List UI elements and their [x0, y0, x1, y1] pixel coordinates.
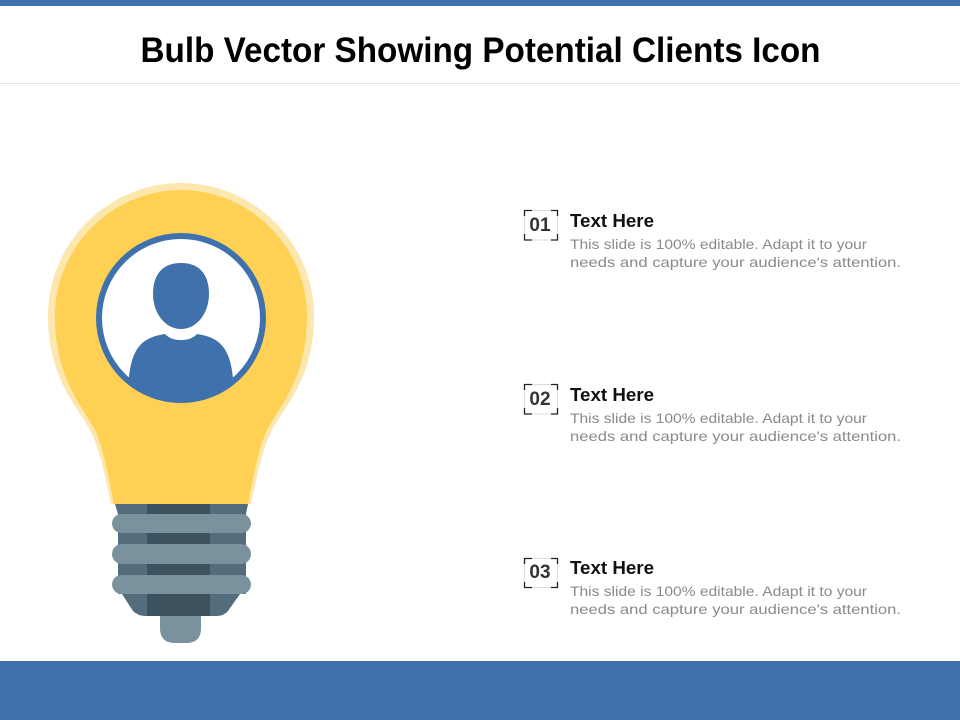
base tip: [160, 616, 201, 643]
portrait circle: [99, 236, 263, 400]
top bar: [0, 0, 960, 6]
bulb glass: [55, 190, 307, 504]
screw ring 1: [112, 514, 251, 533]
screw ring 2: [112, 544, 251, 564]
description 01: needs and capture your audience's attention.: [570, 254, 901, 270]
bulb glow outline: [48, 183, 314, 504]
item 02: [524, 384, 901, 444]
number badge 01: 01: [529, 215, 551, 236]
item 01: [524, 210, 901, 270]
description 02: needs and capture your audience's attention.: [570, 428, 901, 444]
screw ring 3: [112, 575, 251, 594]
screw base sides: [115, 504, 248, 616]
number badge 02: 02: [529, 389, 551, 410]
number badge 03: [524, 558, 558, 588]
icon: light bulb: [48, 183, 314, 643]
title: Bulb Vector Showing Potential Clients Icon: [140, 31, 820, 70]
item 03: [524, 558, 901, 617]
description 02: This slide is 100% editable. Adapt it to your: [570, 410, 867, 426]
footer bar: [0, 661, 960, 720]
description 03: This slide is 100% editable. Adapt it to your: [570, 583, 867, 599]
description 01: This slide is 100% editable. Adapt it to your: [570, 236, 867, 252]
heading 03: Text Here: [570, 558, 654, 578]
person head: [153, 263, 209, 329]
description 03: needs and capture your audience's attention.: [570, 601, 901, 617]
person body: [129, 334, 233, 410]
number badge 01: [524, 210, 558, 240]
heading 02: Text Here: [570, 385, 654, 405]
number badge 03: 03: [529, 562, 551, 583]
heading 01: Text Here: [570, 211, 654, 231]
number badge 02: [524, 384, 558, 414]
screw base centre: [147, 504, 210, 616]
